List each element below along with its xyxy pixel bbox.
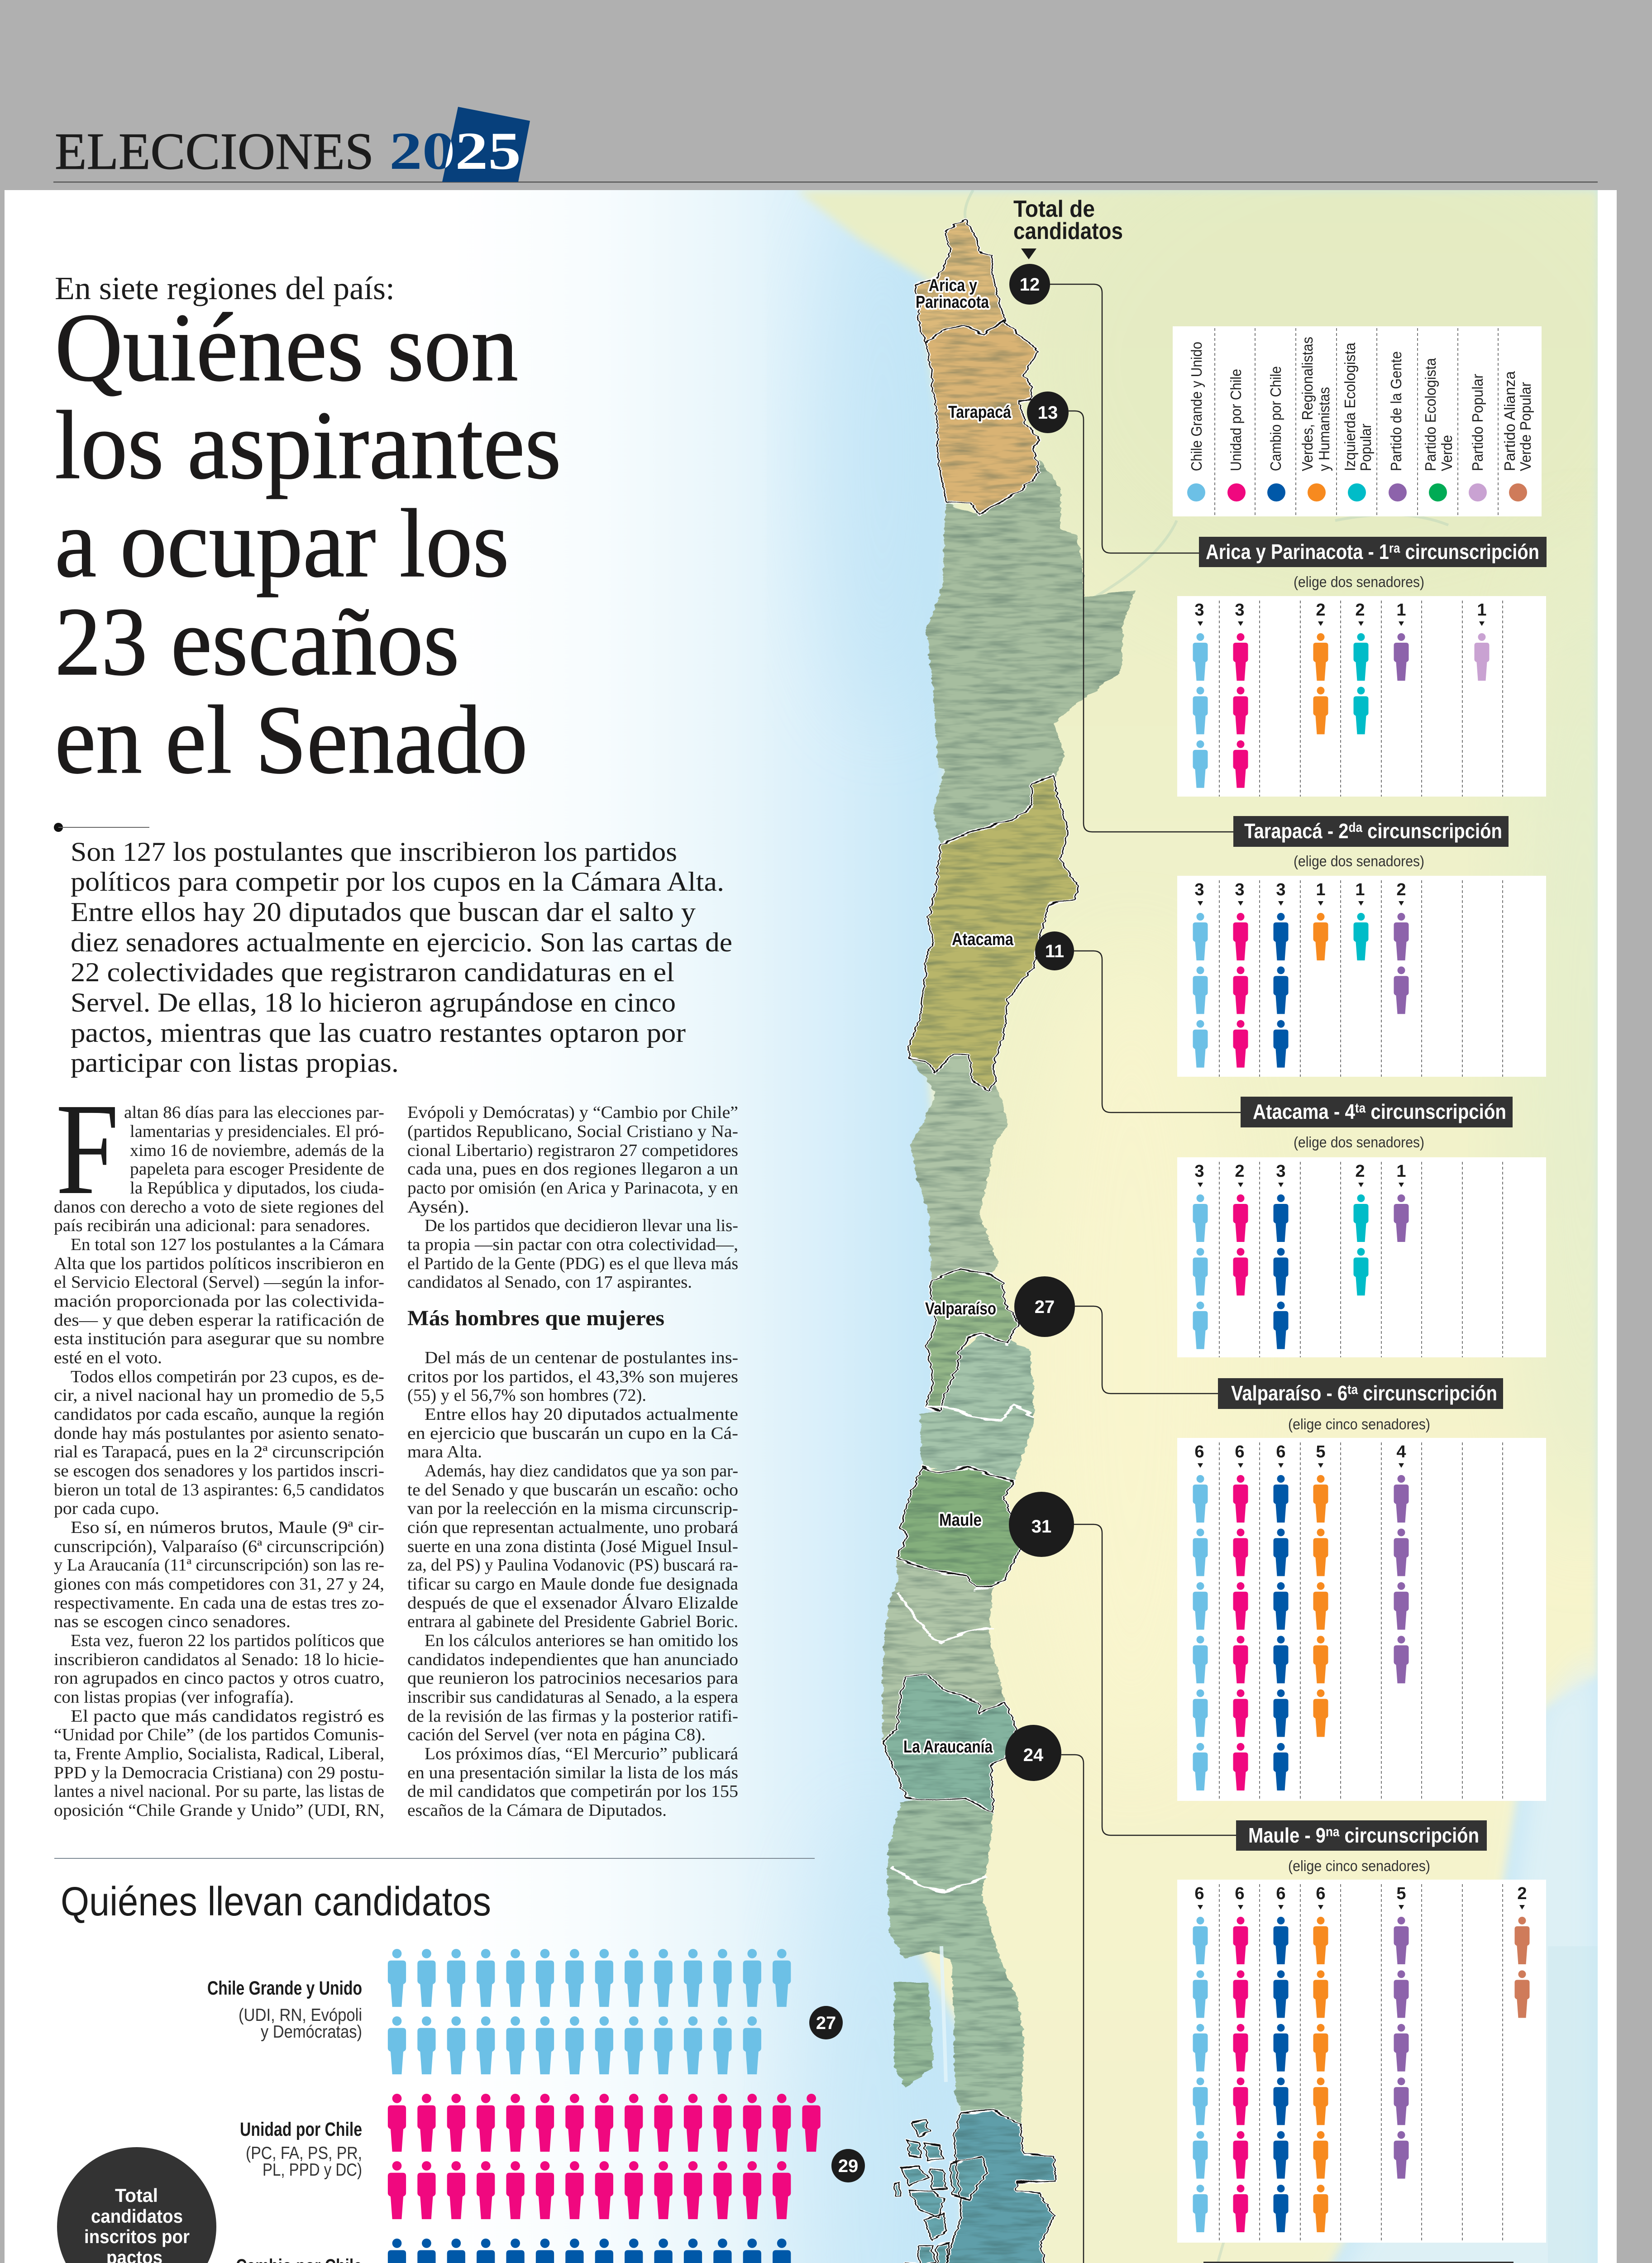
body text column 2: Del más de un centenar de postulantes ins- (425, 1348, 738, 1367)
body text column 1: se escogen dos senadores y los partidos inscri- (54, 1461, 384, 1480)
panel: Maule: 2 (1517, 1884, 1527, 1903)
panel: Arica y Parinacota (1177, 537, 1547, 797)
legend labels (1188, 337, 1534, 471)
body text column 2: suerte en una zona distinta (José Miguel Insul- (407, 1537, 738, 1556)
panel: Atacama: 2 (1235, 1162, 1245, 1181)
panel: Arica y Parinacota: 1 (1477, 601, 1487, 620)
panel: Atacama: Atacama - 4 (1253, 1100, 1370, 1123)
kicker: En siete regiones del país: (55, 270, 395, 306)
section header: Elecciones 2025 (53, 107, 1598, 183)
map labels: region names: Tarapacá (948, 403, 1012, 422)
legend labels: Partido de la Gente (1388, 351, 1404, 471)
legend panel (1173, 326, 1542, 516)
row: Unidad por Chile: Unidad por Chile (240, 2119, 362, 2140)
panel: Maule (1177, 1820, 1546, 2243)
body text column 2: (partidos Republicano, Social Cristiano y Na- (407, 1122, 738, 1141)
chart heading: Quiénes llevan candidatos (61, 1879, 491, 1924)
headline bullet rule (54, 823, 149, 832)
body text column 1: lantes a nivel nacional. Por su parte, las listas de (54, 1782, 384, 1801)
panel: Tarapaca: (elige dos senadores) (1294, 853, 1424, 869)
panel: Tarapaca (1177, 816, 1546, 1077)
circle: total candidatos por pactos: inscritos por (84, 2226, 190, 2247)
panel: Tarapaca: 1 (1316, 880, 1326, 899)
panel: Arica y Parinacota: (elige dos senadores) (1294, 573, 1424, 590)
chart: Quiénes llevan candidatos (54, 1858, 868, 2263)
panel: Atacama: 2 (1355, 1162, 1365, 1181)
panel: Valparaiso: 6 (1194, 1442, 1204, 1461)
intro paragraph: políticos para competir por los cupos en la Cámara Alta. (71, 867, 724, 897)
panel: Atacama: 3 (1276, 1162, 1286, 1181)
region: Nuble and Biobio (883, 1558, 1007, 1742)
panel: Tarapaca: circunscripción (1362, 819, 1502, 843)
body text column 1: El pacto que más candidatos registró es (71, 1707, 384, 1726)
panel: Maule: 6 (1194, 1884, 1204, 1903)
main headline: en el Senado (55, 686, 528, 794)
subheading: Más hombres que mujeres (407, 1306, 664, 1330)
row: Unidad por Chile (240, 2094, 865, 2219)
panel: Maule: 5 (1396, 1884, 1406, 1903)
body text column 2: entrara al gabinete del Presidente Gabriel Boric. (407, 1612, 738, 1631)
panel: Tarapaca: 3 (1194, 880, 1204, 899)
body text column 1: candidatos por cada escaño, aunque la región (54, 1405, 384, 1424)
main headline: a ocupar los (55, 489, 509, 597)
main headline: los aspirantes (55, 391, 561, 499)
region fill: Tarapaca (925, 320, 1040, 515)
map labels: region names: La Araucanía (903, 1738, 993, 1757)
body text column 1: esté en el voto. (54, 1348, 162, 1367)
outlines white halo (883, 220, 1078, 2263)
region fill: Aysen (883, 2110, 1056, 2263)
legend labels: Izquierda Ecologista (1342, 342, 1358, 471)
body text column 2: candidatos independientes que han anunciado (407, 1650, 738, 1669)
legend labels: Partido Popular (1469, 374, 1486, 471)
region: Los Rios and Los Lagos (887, 1798, 1024, 2126)
main headline: 23 escaños (55, 587, 459, 696)
region: Metropolitana and O'Higgins (920, 1333, 1035, 1481)
panel: Arica y Parinacota: 3 (1235, 601, 1245, 620)
outlines black (883, 220, 1078, 2263)
legend labels: Cambio por Chile (1267, 366, 1284, 471)
panel: Arica y Parinacota: 1 (1396, 601, 1406, 620)
panel: Atacama: circunscripción (1366, 1100, 1506, 1123)
body text column 1: ron agrupados en cinco pactos y otros cuatro, (54, 1669, 384, 1688)
panel: Maule: 6 (1276, 1884, 1286, 1903)
panel: Arica y Parinacota: 2 (1355, 601, 1365, 620)
main headline (55, 293, 561, 794)
body text column 2: inscribir sus candidaturas al Senado, a la espera (407, 1688, 738, 1707)
row: Chile Grande y Unido: Chile Grande y Unido (207, 1977, 362, 1999)
panel: Maule: na (1326, 1824, 1340, 1839)
body text column 1: altan 86 días para las elecciones par- (124, 1103, 384, 1122)
body text column 2: mara Alta. (407, 1442, 482, 1461)
section header: Elecciones 2025: 2025 (389, 121, 521, 181)
body text column 1: con listas propias (ver infografía). (54, 1688, 294, 1707)
region total badges: 31 (1031, 1517, 1051, 1537)
panel: Valparaiso: Valparaíso - 6 (1231, 1381, 1366, 1405)
intro paragraph: pactos, mientras que las cuatro restantes optaron por (71, 1018, 686, 1048)
panel: Tarapaca: 3 (1276, 880, 1286, 899)
panel: Arica y Parinacota: ra (1389, 541, 1400, 556)
body text column 2: después de que el exsenador Álvaro Elizalde (407, 1594, 738, 1613)
body text column 2: que reunieron los patrocinios necesarios para (407, 1669, 738, 1688)
region fill: Atacama (908, 775, 1078, 1091)
panel: Tarapaca: Tarapacá - 2 (1244, 819, 1364, 843)
body text column 2: van por la reelección en la misma circunscrip- (407, 1499, 738, 1518)
body text column 1: danos con derecho a voto de siete regiones del (54, 1198, 384, 1217)
panel: Tarapaca: 2 (1396, 880, 1406, 899)
body text column 1: ta, Frente Amplio, Socialista, Radical, Liberal, (54, 1744, 384, 1763)
panel: Atacama: (elige dos senadores) (1294, 1134, 1424, 1151)
body text column 1: En total son 127 los postulantes a la Cámara (71, 1235, 384, 1254)
legend labels: y Humanistas (1316, 387, 1332, 471)
legend labels: Chile Grande y Unido (1188, 342, 1205, 471)
body text column 1: lamentarias y presidenciales. El pró- (130, 1122, 384, 1141)
legend labels: Verde (1438, 435, 1455, 471)
legend labels: Unidad por Chile (1227, 369, 1244, 471)
island: Chiloe (894, 1982, 933, 2088)
body text column 2: Los próximos días, “El Mercurio” publicará (425, 1744, 738, 1763)
body text column 1: cunscripción), Valparaíso (6ª circunscripción) (54, 1537, 384, 1556)
panel: Arica y Parinacota: 3 (1194, 601, 1204, 620)
body text column 2: cada una, pues en dos regiones llegaron a un (407, 1160, 738, 1179)
map labels: region names: Atacama (952, 930, 1014, 949)
map labels: region names: Maule (939, 1511, 982, 1530)
body text column 1: cir, a nivel nacional hay un promedio de 5,5 (54, 1386, 384, 1405)
region fill: Maule (896, 1467, 1021, 1588)
region total badges (1005, 264, 1075, 2263)
body text column 2: en ejercicio que buscarán un cupo en la Cá- (407, 1424, 738, 1443)
body text column 2: critos por los partidos, el 43,3% son mujeres (407, 1367, 738, 1386)
body text column 1: ximo 16 de noviembre, además de la (130, 1141, 384, 1160)
panel: Maule: 6 (1235, 1884, 1245, 1903)
body text column 1: PPD y la Democracia Cristiana) con 29 postu- (54, 1763, 384, 1782)
body text column 2: de la revisión de las firmas y la posterior ratifi- (407, 1707, 738, 1726)
body text column 1: bieron un total de 13 aspirantes: 6,5 candidatos (54, 1480, 384, 1499)
body text column 1: el Servicio Electoral (Servel) —según la infor- (54, 1273, 384, 1292)
circle: total candidatos por pactos (57, 2147, 216, 2263)
total de candidatos heading: candidatos (1013, 218, 1123, 244)
body text column 2: Además, hay diez candidatos que ya son par- (425, 1461, 738, 1480)
white internal region boundaries (892, 1405, 1035, 1892)
body text column 2: de mil candidatos que competirán por los 155 (407, 1782, 738, 1801)
body text column 2 (407, 1103, 738, 1820)
region: Coquimbo (910, 1055, 1007, 1281)
body text column 1: Todos ellos competirán por 23 cupos, es de- (71, 1367, 384, 1386)
panel: Atacama (1177, 1097, 1546, 1357)
row: Unidad por Chile: PL, PPD y DC) (263, 2160, 362, 2180)
panel: Atacama: ta (1355, 1101, 1366, 1116)
body text column 2: (55) y el 56,7% son hombres (72). (407, 1386, 646, 1405)
body text column 2: za, del PS) y Paulina Vodanovic (PS) buscará ra- (407, 1556, 738, 1575)
body text column 1: por cada cupo. (54, 1499, 159, 1518)
panel: La Araucania (1177, 2262, 1546, 2263)
panel: Valparaiso: (elige cinco senadores) (1288, 1416, 1430, 1432)
total de candidatos heading: Total de (1013, 196, 1095, 222)
body text column 2: tificar su cargo en Maule donde fue designada (407, 1575, 738, 1594)
body text column 2: candidatos al Senado, con 17 aspirantes. (407, 1273, 692, 1292)
intro paragraph: participar con listas propias. (71, 1048, 399, 1078)
row: Chile Grande y Unido: y Demócratas) (261, 2022, 362, 2042)
body text column 1: Eso sí, en números brutos, Maule (9ª cir- (71, 1518, 384, 1537)
body text column 2: ta propia —sin pactar con otra colectividad—, (407, 1235, 738, 1254)
region fill: Arica y Parinacota (915, 220, 1005, 343)
legend labels: Partido Alianza (1501, 371, 1518, 471)
panel: Tarapaca: 1 (1355, 880, 1365, 899)
body text column 1: “Unidad por Chile” (de los partidos Comunis- (54, 1725, 384, 1744)
body text column 1: la República y diputados, los ciuda- (130, 1179, 384, 1198)
region: Antofagasta (926, 460, 1136, 844)
region fill: La Araucania (883, 1673, 1017, 1813)
panel: Maule: Maule - 9 (1248, 1824, 1337, 1847)
panel: Atacama: 3 (1194, 1162, 1204, 1181)
body text column 1: inscribieron candidatos al Senado: 18 lo hicie- (54, 1650, 384, 1669)
fjords (919, 1946, 1132, 2263)
region total badges: 24 (1023, 1745, 1044, 1765)
body text column 1: mación proporcionada por las colectivida- (54, 1292, 384, 1311)
panel: Tarapaca: 3 (1235, 880, 1245, 899)
body text column 2: el Partido de la Gente (PDG) es el que lleva más (407, 1254, 738, 1273)
body text column 1: rial es Tarapacá, pues en la 2ª circunscripción (54, 1442, 384, 1461)
body text column 1: Alta que los partidos políticos inscribieron en (54, 1254, 384, 1273)
panel: Valparaiso: ta (1347, 1382, 1358, 1397)
row: Unidad por Chile: (PC, FA, PS, PR, (246, 2144, 362, 2163)
body text column 1: respectivamente. En cada una de estas tres zo- (54, 1594, 384, 1613)
body text column 2: te del Senado y que buscarán un escaño: ocho (407, 1480, 738, 1499)
row: Chile Grande y Unido (207, 1949, 843, 2074)
panel: Atacama: 1 (1396, 1162, 1406, 1181)
Aysen islands fill (894, 2120, 996, 2263)
main headline: Quiénes son (55, 293, 518, 401)
panel: Valparaiso: 6 (1276, 1442, 1286, 1461)
region total badges: 27 (1035, 1297, 1055, 1317)
intro paragraph: Son 127 los postulantes que inscribieron los partidos (71, 837, 677, 867)
panel: Valparaiso: 4 (1396, 1442, 1406, 1461)
panel: Valparaiso: 6 (1235, 1442, 1245, 1461)
panel: Arica y Parinacota: 2 (1316, 601, 1326, 620)
row: Unidad por Chile: 29 (838, 2156, 858, 2176)
body text column 2: cación del Servel (ver nota en página C8). (407, 1725, 706, 1744)
circle: total candidatos por pactos: candidatos (91, 2206, 183, 2227)
intro paragraph: Servel. De ellas, 18 lo hicieron agrupándose en cinco (71, 988, 676, 1017)
body text column 1: des— y que deben esperar la ratificación de (54, 1311, 384, 1330)
panel: Arica y Parinacota: Arica y Parinacota - 1 (1206, 540, 1418, 563)
legend colour dots (1187, 483, 1527, 501)
body text column 1: esta institución para asegurar que su nombre (54, 1329, 384, 1348)
legend labels: Popular (1357, 424, 1374, 471)
body text column 2: escaños de la Cámara de Diputados. (407, 1801, 667, 1820)
circle: total candidatos por pactos: Total (115, 2185, 158, 2206)
map: Chile regions (883, 220, 1238, 2263)
intro paragraph: diez senadores actualmente en ejercicio. Son las cartas de (71, 927, 732, 957)
body text column 1 (54, 1076, 384, 1820)
map labels: region names: Arica y (929, 276, 977, 295)
body text column 1: y La Araucanía (11ª circunscripción) son las re- (54, 1556, 384, 1575)
panel: Maule: 6 (1316, 1884, 1326, 1903)
body text column 2: En los cálculos anteriores se han omitido los (425, 1631, 738, 1650)
body text column 2: Entre ellos hay 20 diputados actualmente (425, 1405, 738, 1424)
row: Chile Grande y Unido: 27 (816, 2013, 836, 2033)
row: Chile Grande y Unido: (UDI, RN, Evópoli (239, 2005, 362, 2025)
panel: Arica y Parinacota: circunscripción (1400, 540, 1539, 563)
row: Cambio por Chile (234, 2239, 836, 2263)
body text column 1: país recibirán una adicional: para senadores. (54, 1216, 370, 1235)
body text column 2: cional Libertario) registraron 27 competidores (407, 1141, 738, 1160)
region fill: Valparaiso (926, 1269, 1019, 1410)
legend labels: Partido Ecologista (1422, 358, 1439, 471)
connector lines (1050, 284, 1241, 2263)
body text column 2: Evópoli y Demócratas) y “Cambio por Chile” (407, 1103, 738, 1122)
body text column 2: ción que representan actualmente, uno probará (407, 1518, 738, 1537)
region total badges: 11 (1045, 941, 1064, 961)
body text column 1: giones con más competidores con 31, 27 y 24, (54, 1575, 384, 1594)
drop cap: F (56, 1076, 119, 1222)
body text column 2: en una presentación similar la lista de los más (407, 1763, 738, 1782)
panel: Tarapaca: da (1349, 820, 1362, 835)
total de candidatos heading (1013, 196, 1123, 259)
body text column 1: oposición “Chile Grande y Unido” (UDI, RN, (54, 1801, 384, 1820)
region total badges: 13 (1038, 403, 1058, 423)
watercolor map background (317, 91, 1652, 2263)
panel: Valparaiso: circunscripción (1358, 1381, 1497, 1405)
section header: Elecciones 2025: 2025 (389, 121, 521, 181)
body text column 2: De los partidos que decidieron llevar una lis- (425, 1216, 738, 1235)
intro paragraph: Entre ellos hay 20 diputados que buscan dar el salto y (71, 897, 696, 927)
body text column 1: papeleta para escoger Presidente de (130, 1160, 384, 1179)
body text column 1: Esta vez, fueron 22 los partidos políticos que (71, 1631, 384, 1650)
intro paragraph (71, 837, 732, 1078)
panel: Valparaiso: 5 (1316, 1442, 1326, 1461)
map labels: region names: Valparaíso (925, 1299, 996, 1318)
body text column 1: nas se escogen cinco senadores. (54, 1612, 291, 1631)
body text column 1: donde hay más postulantes por asiento senato- (54, 1424, 384, 1443)
legend labels: Verdes, Regionalistas (1299, 337, 1316, 471)
intro paragraph: 22 colectividades que registraron candidaturas en el (71, 957, 674, 987)
section header: Elecciones 2025: ELECCIONES (55, 123, 374, 180)
map labels: region names (903, 276, 1017, 2263)
body text column 2: Aysén). (407, 1198, 469, 1217)
panel: Valparaiso (1177, 1378, 1546, 1801)
panel: Maule: circunscripción (1339, 1824, 1479, 1847)
legend labels: Verde Popular (1517, 382, 1534, 471)
map labels: region names: Parinacota (916, 293, 989, 312)
region total badges: 12 (1020, 275, 1040, 295)
panel: Maule: (elige cinco senadores) (1288, 1857, 1430, 1874)
body text column 2: pacto por omisión (en Arica y Parinacota, y en (407, 1179, 738, 1198)
